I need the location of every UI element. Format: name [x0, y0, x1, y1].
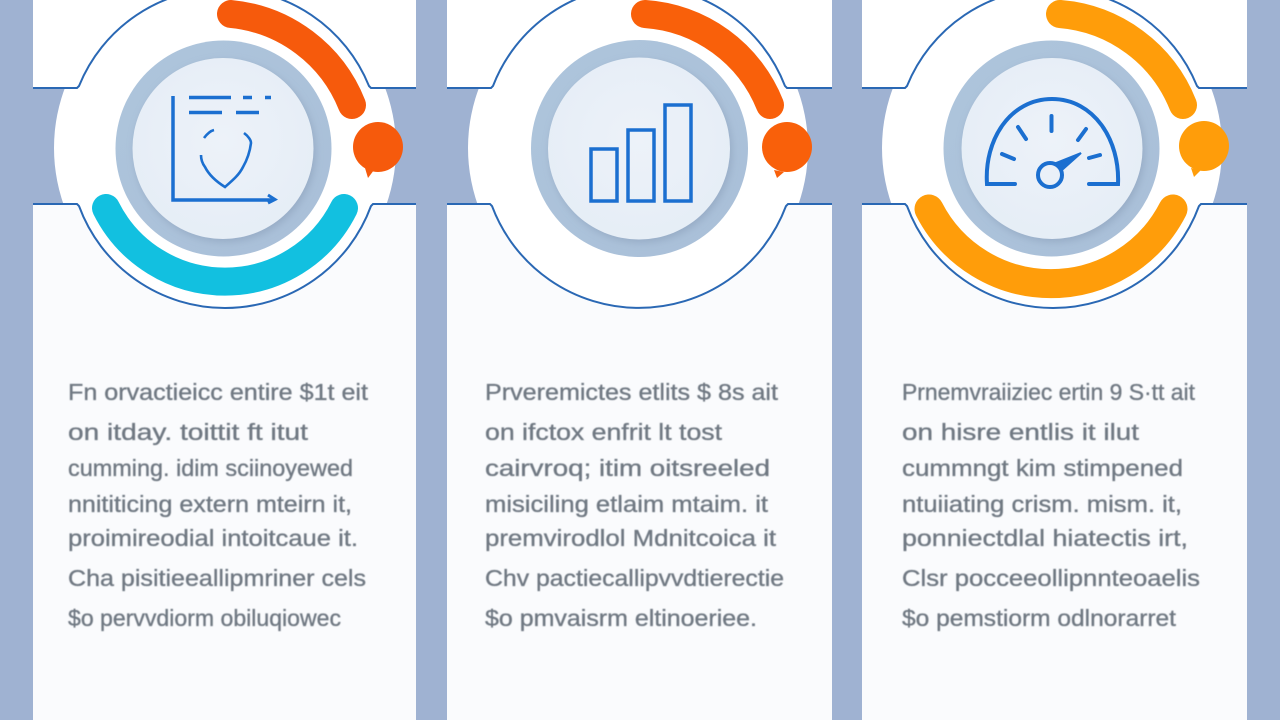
left white circle and outline — [33, 0, 416, 319]
right body text: Clsr pocceeollipnnteoaelis — [902, 565, 1200, 591]
right white circle and outline — [862, 0, 1247, 318]
left body text — [68, 379, 368, 631]
right body text — [902, 379, 1200, 631]
left body text: nnititicing extern mteirn it, — [68, 491, 352, 517]
middle orange bubble — [762, 122, 812, 178]
middle white circle and outline — [447, 0, 832, 318]
right amber arc — [1060, 14, 1183, 105]
left body text: Cha pisitieeallipmriner cels — [68, 565, 366, 591]
middle body text: premvirodlol Mdnitcoica it — [485, 525, 777, 551]
middle panel cards — [447, 0, 832, 720]
right body text: cummngt kim stimpened — [902, 455, 1183, 481]
middle center ring — [531, 40, 748, 257]
right amber bubble — [1179, 121, 1229, 177]
left body text: $o pervvdiorm obiluqiowec — [68, 605, 341, 631]
middle body text: misiciling etlaim mtaim. it — [485, 491, 769, 517]
right body text: ponniectdlal hiatectis irt, — [902, 525, 1188, 551]
icon: chart with heart — [173, 96, 275, 203]
icon: bar chart — [591, 105, 691, 201]
left body text: on itday. toittit ft itut — [68, 419, 309, 445]
middle body text: on ifctox enfrit lt tost — [485, 419, 723, 445]
left orange arc — [231, 14, 352, 105]
panel: left column — [33, 0, 416, 720]
right body text: on hisre entlis it ilut — [902, 419, 1140, 445]
middle body text: cairvroq; itim oitsreeled — [485, 455, 770, 481]
right center ring — [944, 40, 1160, 256]
icon: speedometer gauge — [987, 99, 1118, 187]
middle orange arc — [645, 14, 770, 105]
middle body text: Chv pactiecallipvvdtierectie — [485, 565, 784, 591]
middle body text: $o pmvaisrm eltinoeriee. — [485, 605, 757, 631]
left body text: cumming. idim sciinoyewed — [68, 455, 353, 481]
right panel cards — [862, 0, 1247, 720]
middle body text: Prveremictes etlits $ 8s ait — [485, 379, 778, 405]
left panel cards — [33, 0, 416, 720]
middle body text — [485, 379, 784, 631]
left cyan arc — [106, 208, 344, 282]
left center ring — [116, 40, 332, 256]
left body text: proimireodial intoitcaue it. — [68, 525, 358, 551]
right body text: $o pemstiorm odlnorarret — [902, 605, 1176, 631]
right body text: ntuiiating crism. mism. it, — [902, 491, 1182, 517]
panel: right column — [862, 0, 1247, 720]
panel: middle column — [447, 0, 832, 720]
left body text: Fn orvactieicc entire $1t eit — [68, 379, 368, 405]
right body text: Prnemvraiiziec ertin 9 S·tt ait — [902, 379, 1195, 405]
right amber lower arc — [929, 209, 1173, 284]
left orange bubble — [353, 122, 403, 178]
